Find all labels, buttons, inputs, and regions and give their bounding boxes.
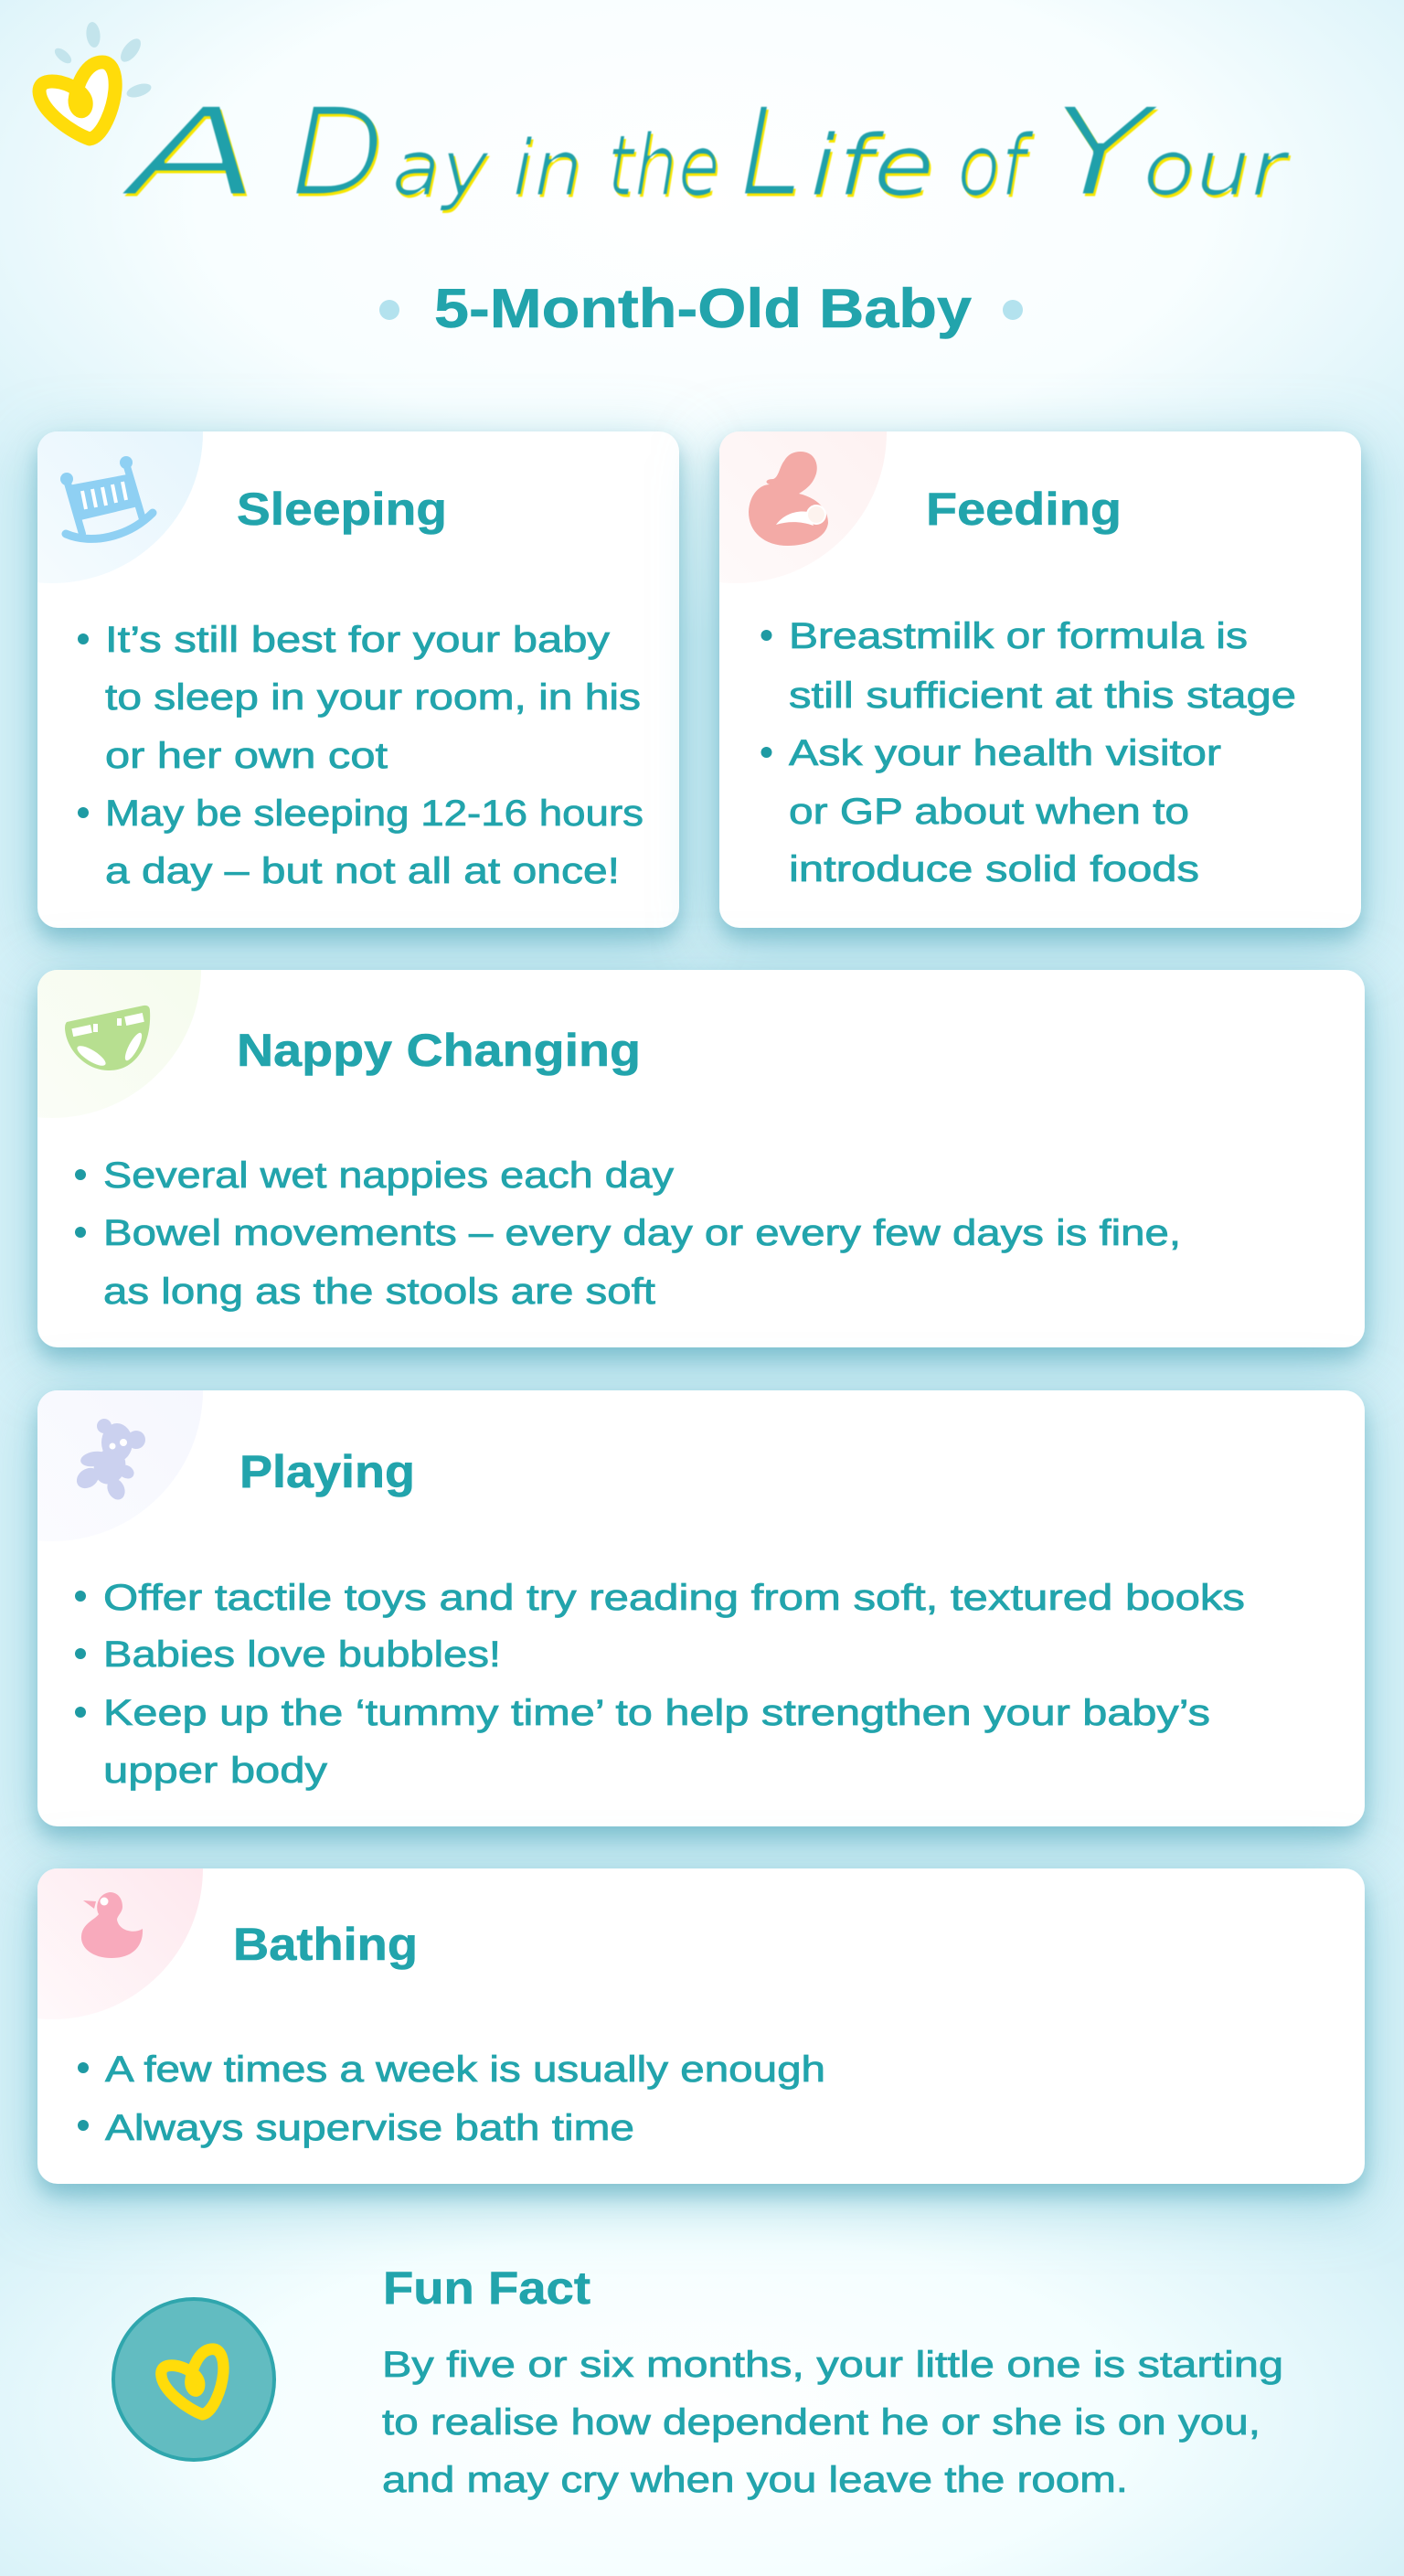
icon: mother feeding baby	[749, 452, 828, 546]
fact text: By five or six months, your little one is starting	[382, 2345, 1283, 2385]
fact text	[382, 2345, 1283, 2500]
title: ife	[809, 117, 935, 215]
icon: rubber duck	[81, 1892, 143, 1958]
panel: sleeping	[5, 410, 709, 970]
heading: Sleeping	[237, 484, 447, 535]
bullet list: Several wet nappies each day	[103, 1155, 674, 1196]
bullet list: Babies love bubbles!	[103, 1634, 501, 1675]
heading: Nappy Changing	[237, 1025, 641, 1076]
bullet list: upper body	[103, 1751, 327, 1791]
bullet list	[75, 1578, 1245, 1791]
bullet list	[78, 620, 644, 891]
bullet list: still sufficient at this stage	[789, 676, 1296, 716]
bullet list: Bowel movements – every day or every few days is fine,	[103, 1213, 1181, 1253]
bullet list: Ask your health visitor	[789, 733, 1221, 773]
fact text: and may cry when you leave the room.	[382, 2460, 1128, 2500]
title: ay	[391, 123, 490, 213]
bullet list: a day – but not all at once!	[105, 851, 620, 891]
bullet list: Keep up the ‘tummy time’ to help strengthen your baby’s	[103, 1693, 1210, 1733]
title: L	[739, 81, 804, 224]
title: Y	[1049, 81, 1164, 224]
icon: rocking crib	[60, 456, 153, 538]
bullet list: introduce solid foods	[789, 849, 1199, 889]
title: of	[957, 117, 1035, 215]
bullet list: Always supervise bath time	[105, 2108, 634, 2148]
bullet list: Breastmilk or formula is	[789, 616, 1248, 656]
bullet list: or her own cot	[105, 736, 388, 776]
heading: Playing	[239, 1446, 415, 1497]
bullet list: A few times a week is usually enough	[105, 2049, 825, 2090]
panel: nappy changing	[5, 956, 1397, 1390]
bullet list: It’s still best for your baby	[105, 620, 610, 660]
title: A	[116, 81, 262, 224]
bullet list	[78, 2049, 825, 2148]
heading: Fun Fact	[383, 2262, 590, 2314]
bullet list	[75, 1155, 1181, 1312]
fact text: to realise how dependent he or she is on you,	[382, 2402, 1260, 2443]
title	[116, 81, 1291, 224]
bullet list: Offer tactile toys and try reading from soft, textured books	[103, 1578, 1245, 1618]
bullet list: or GP about when to	[789, 792, 1189, 832]
heading: Bathing	[233, 1919, 418, 1970]
bullet list	[760, 616, 1296, 889]
icon: teddy bear	[73, 1419, 145, 1503]
panel: playing	[5, 1378, 1397, 1868]
icon: nappy	[65, 1006, 150, 1070]
panel: feeding	[689, 410, 1393, 970]
title: in	[512, 123, 583, 213]
panel: bathing	[5, 1856, 1397, 2238]
panel: fun fact	[113, 2262, 1283, 2500]
bullet list: May be sleeping 12-16 hours	[105, 793, 644, 834]
logo: yellow heart with drops	[39, 21, 153, 139]
icon: heart badge	[113, 2299, 274, 2460]
heading: Feeding	[926, 484, 1122, 535]
title: our	[1143, 123, 1291, 213]
title: D	[290, 81, 386, 224]
title: the	[607, 117, 720, 215]
bullet list: as long as the stools are soft	[103, 1272, 655, 1312]
subtitle with dots: 5-Month-Old Baby	[434, 278, 973, 339]
bullet list: to sleep in your room, in his	[105, 677, 641, 718]
